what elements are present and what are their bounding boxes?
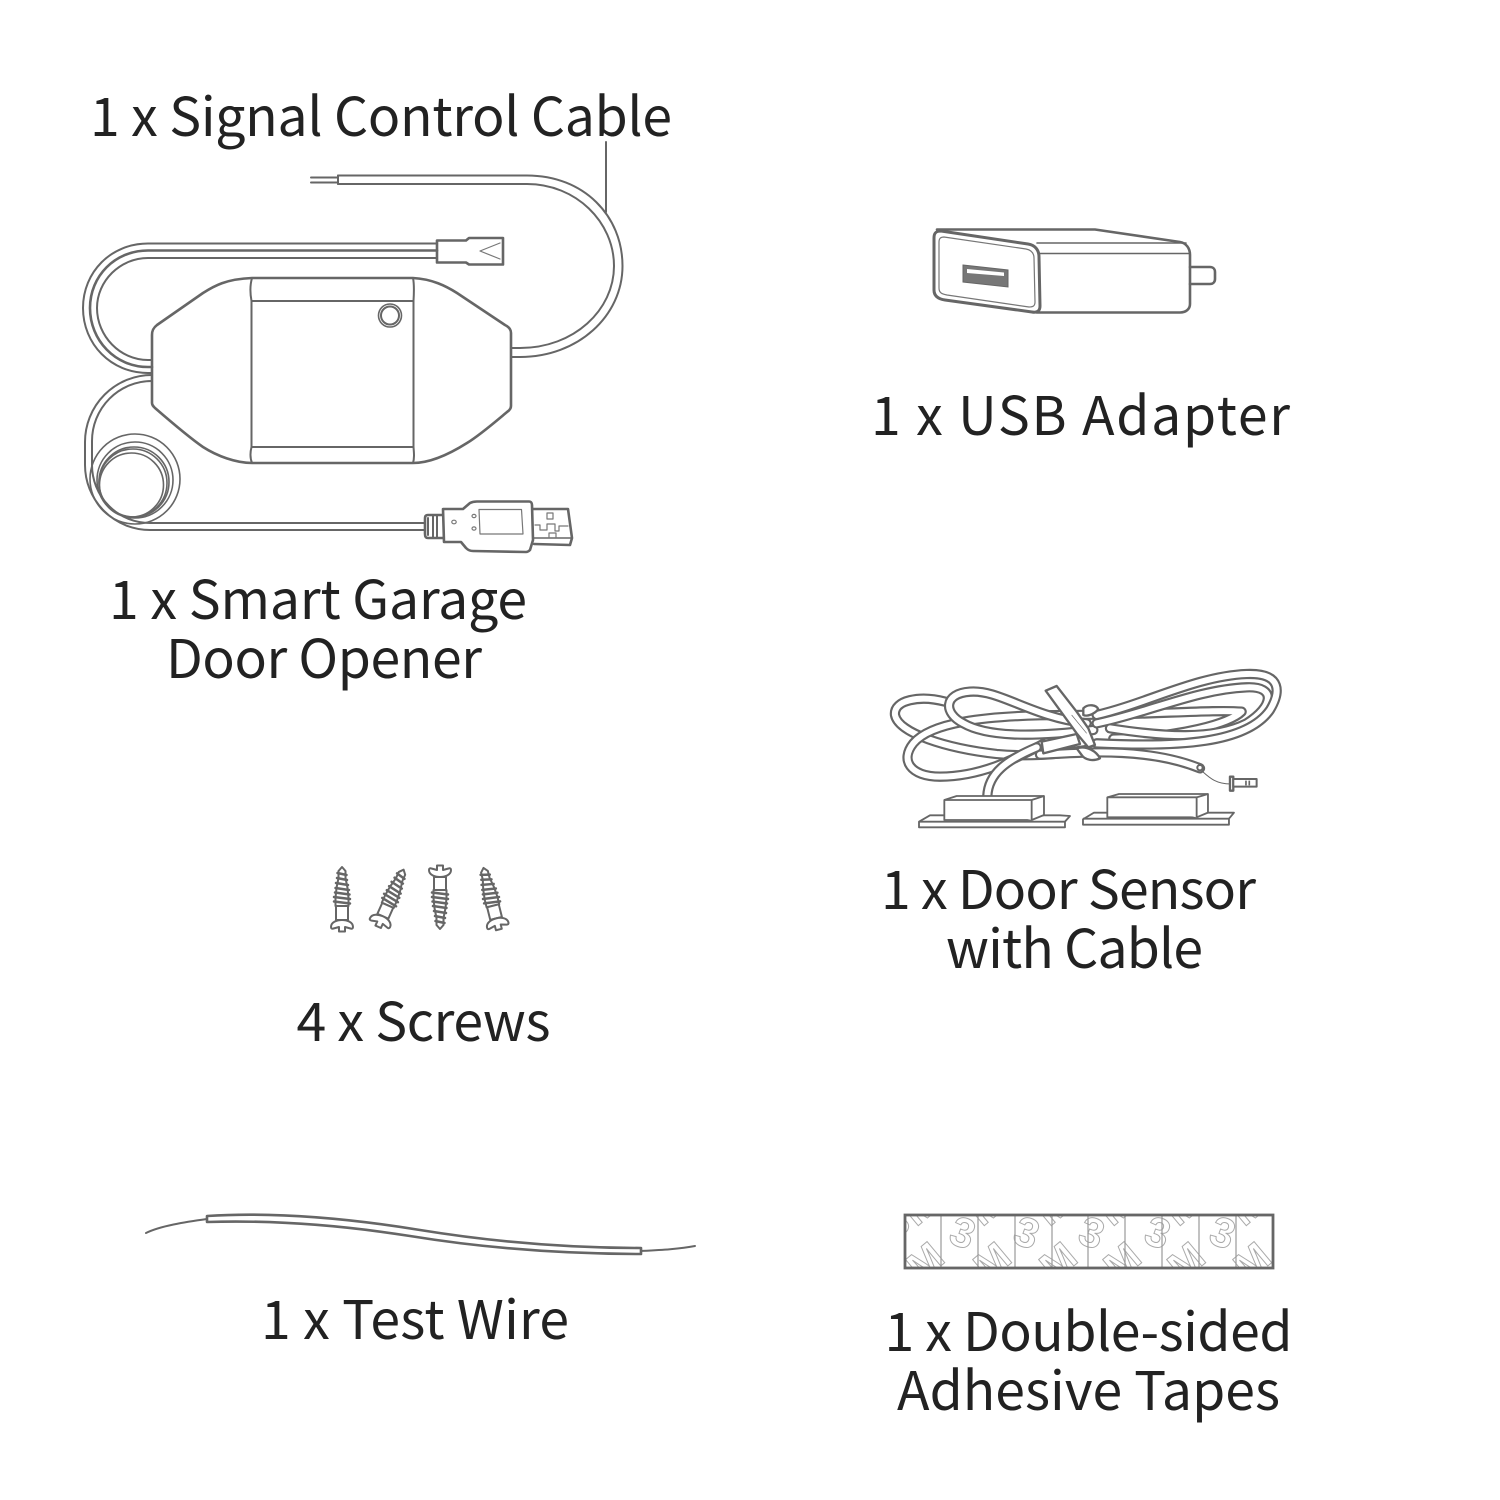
3M pattern: M [1156,1179,1210,1234]
USB plug [425,502,572,552]
illustration: double-sided adhesive tape [904,1214,1274,1270]
3M pattern: M [1096,1234,1150,1289]
3M pattern: M [966,1234,1020,1289]
3M pattern [906,1216,1272,1267]
screw 2 [368,865,414,931]
tape strip [905,1215,1273,1268]
label: door sensor with cable: 1 x Door Sensor [881,848,1256,925]
USB port [963,265,1008,287]
3M pattern: M [1090,1179,1144,1234]
lower power cable and coil [85,375,425,530]
3M pattern: 3 [1008,1206,1046,1259]
3M pattern: M [1027,1179,1081,1234]
3M pattern: M [960,1179,1014,1234]
screw 3 [429,866,451,929]
cable coils [895,674,1277,796]
3M pattern: 3 [1139,1206,1177,1259]
3M pattern: M [1032,1234,1086,1289]
cable connector [437,238,503,264]
illustration: door sensor with cable [895,674,1277,827]
signal control cable [311,176,622,357]
label: double-sided adhesive tapes: 1 x Double-sided [884,1290,1292,1367]
sensor right [1083,794,1234,825]
illustration: screws [331,865,510,932]
cable tie [1046,686,1100,760]
button [378,304,402,327]
3M pattern: 3 [1204,1206,1242,1259]
3M pattern: M [894,1179,948,1234]
3M pattern: M [899,1234,953,1289]
leader line [605,142,607,212]
label: test wire: 1 x Test Wire [261,1278,569,1355]
device body [152,278,511,463]
label: signal control cable: 1 x Signal Control Cable [90,75,672,152]
sensor plug [1197,765,1257,791]
label: USB adapter: 1 x USB Adapter [871,374,1290,451]
label: screws: 4 x Screws [296,980,550,1057]
label: double-sided adhesive tapes: Adhesive Tapes [897,1349,1280,1426]
label: smart garage door opener [109,558,527,694]
label: double-sided adhesive tapes [884,1290,1292,1426]
adapter front face [934,231,1040,312]
screw 4 [473,865,510,932]
3M pattern: 3 [944,1206,982,1259]
adapter pin [1190,267,1215,284]
label: door sensor with cable [881,848,1256,984]
3M pattern: M [1222,1179,1276,1234]
illustration: test wire [146,1215,695,1254]
upper looped cable [83,244,437,373]
label: smart garage door opener: 1 x Smart Garage [109,558,527,635]
label: door sensor with cable: with Cable [946,907,1203,984]
adapter body [937,230,1190,312]
3M pattern: M [1226,1234,1280,1289]
screw 1 [331,867,353,932]
sensor left [919,796,1070,827]
illustration: USB adapter [934,230,1215,312]
label: smart garage door opener: Door Opener [166,617,482,694]
cable sheath [1042,734,1080,753]
3M pattern: 3 [878,1206,916,1259]
3M pattern: M [1160,1234,1214,1289]
illustration: smart garage door opener [83,142,622,552]
3M pattern: 3 [1073,1206,1111,1259]
